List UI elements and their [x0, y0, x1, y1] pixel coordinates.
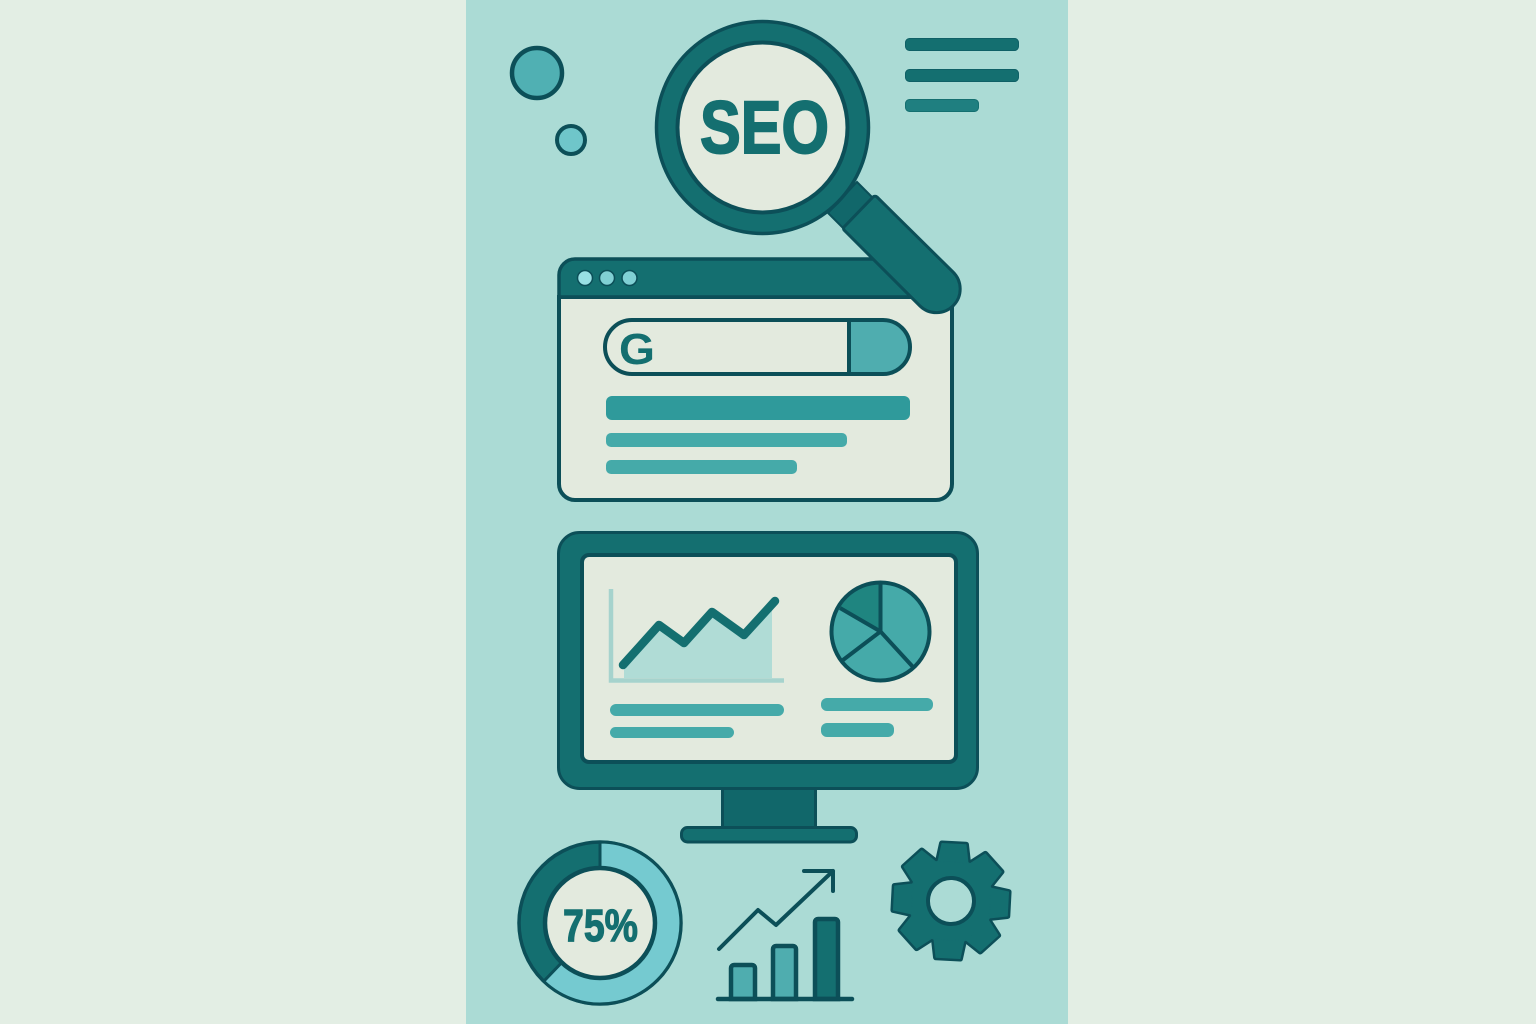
line chart: [611, 589, 784, 680]
growth arrow: [719, 871, 833, 949]
monitor screen: [582, 555, 956, 762]
bars: [731, 919, 838, 999]
monitor: [558, 532, 978, 842]
icon: gear: [891, 841, 1011, 961]
search bar: [605, 320, 910, 374]
percentage label: 75%: [563, 900, 638, 951]
decorative circles: [512, 48, 585, 154]
SEO label: SEO: [700, 86, 829, 169]
search logo letter: G: [619, 325, 655, 374]
magnifier neck: [828, 182, 873, 228]
baseline: [718, 997, 852, 1001]
browser title bar: [559, 259, 920, 297]
magnifier handle: [844, 196, 960, 313]
window control dots: [578, 270, 637, 286]
magnifier ring: [668, 32, 858, 222]
search result bars: [606, 396, 910, 474]
panel: browser window: [559, 259, 952, 500]
gear outline: [891, 841, 1011, 961]
monitor base: [682, 828, 856, 842]
browser body: [559, 297, 952, 500]
gear fill: [891, 841, 1011, 961]
gear hole: [927, 877, 975, 925]
pie chart: [832, 582, 930, 680]
central teal panel: [466, 0, 1068, 1024]
donut chart 75%: [519, 842, 681, 1004]
dashboard text bars: [610, 698, 933, 738]
bar chart with growth arrow: [718, 871, 852, 999]
monitor bezel: [558, 532, 978, 788]
icon: magnifying glass: [656, 22, 960, 313]
monitor stand: [722, 788, 816, 829]
text lines top right: [906, 38, 1018, 112]
